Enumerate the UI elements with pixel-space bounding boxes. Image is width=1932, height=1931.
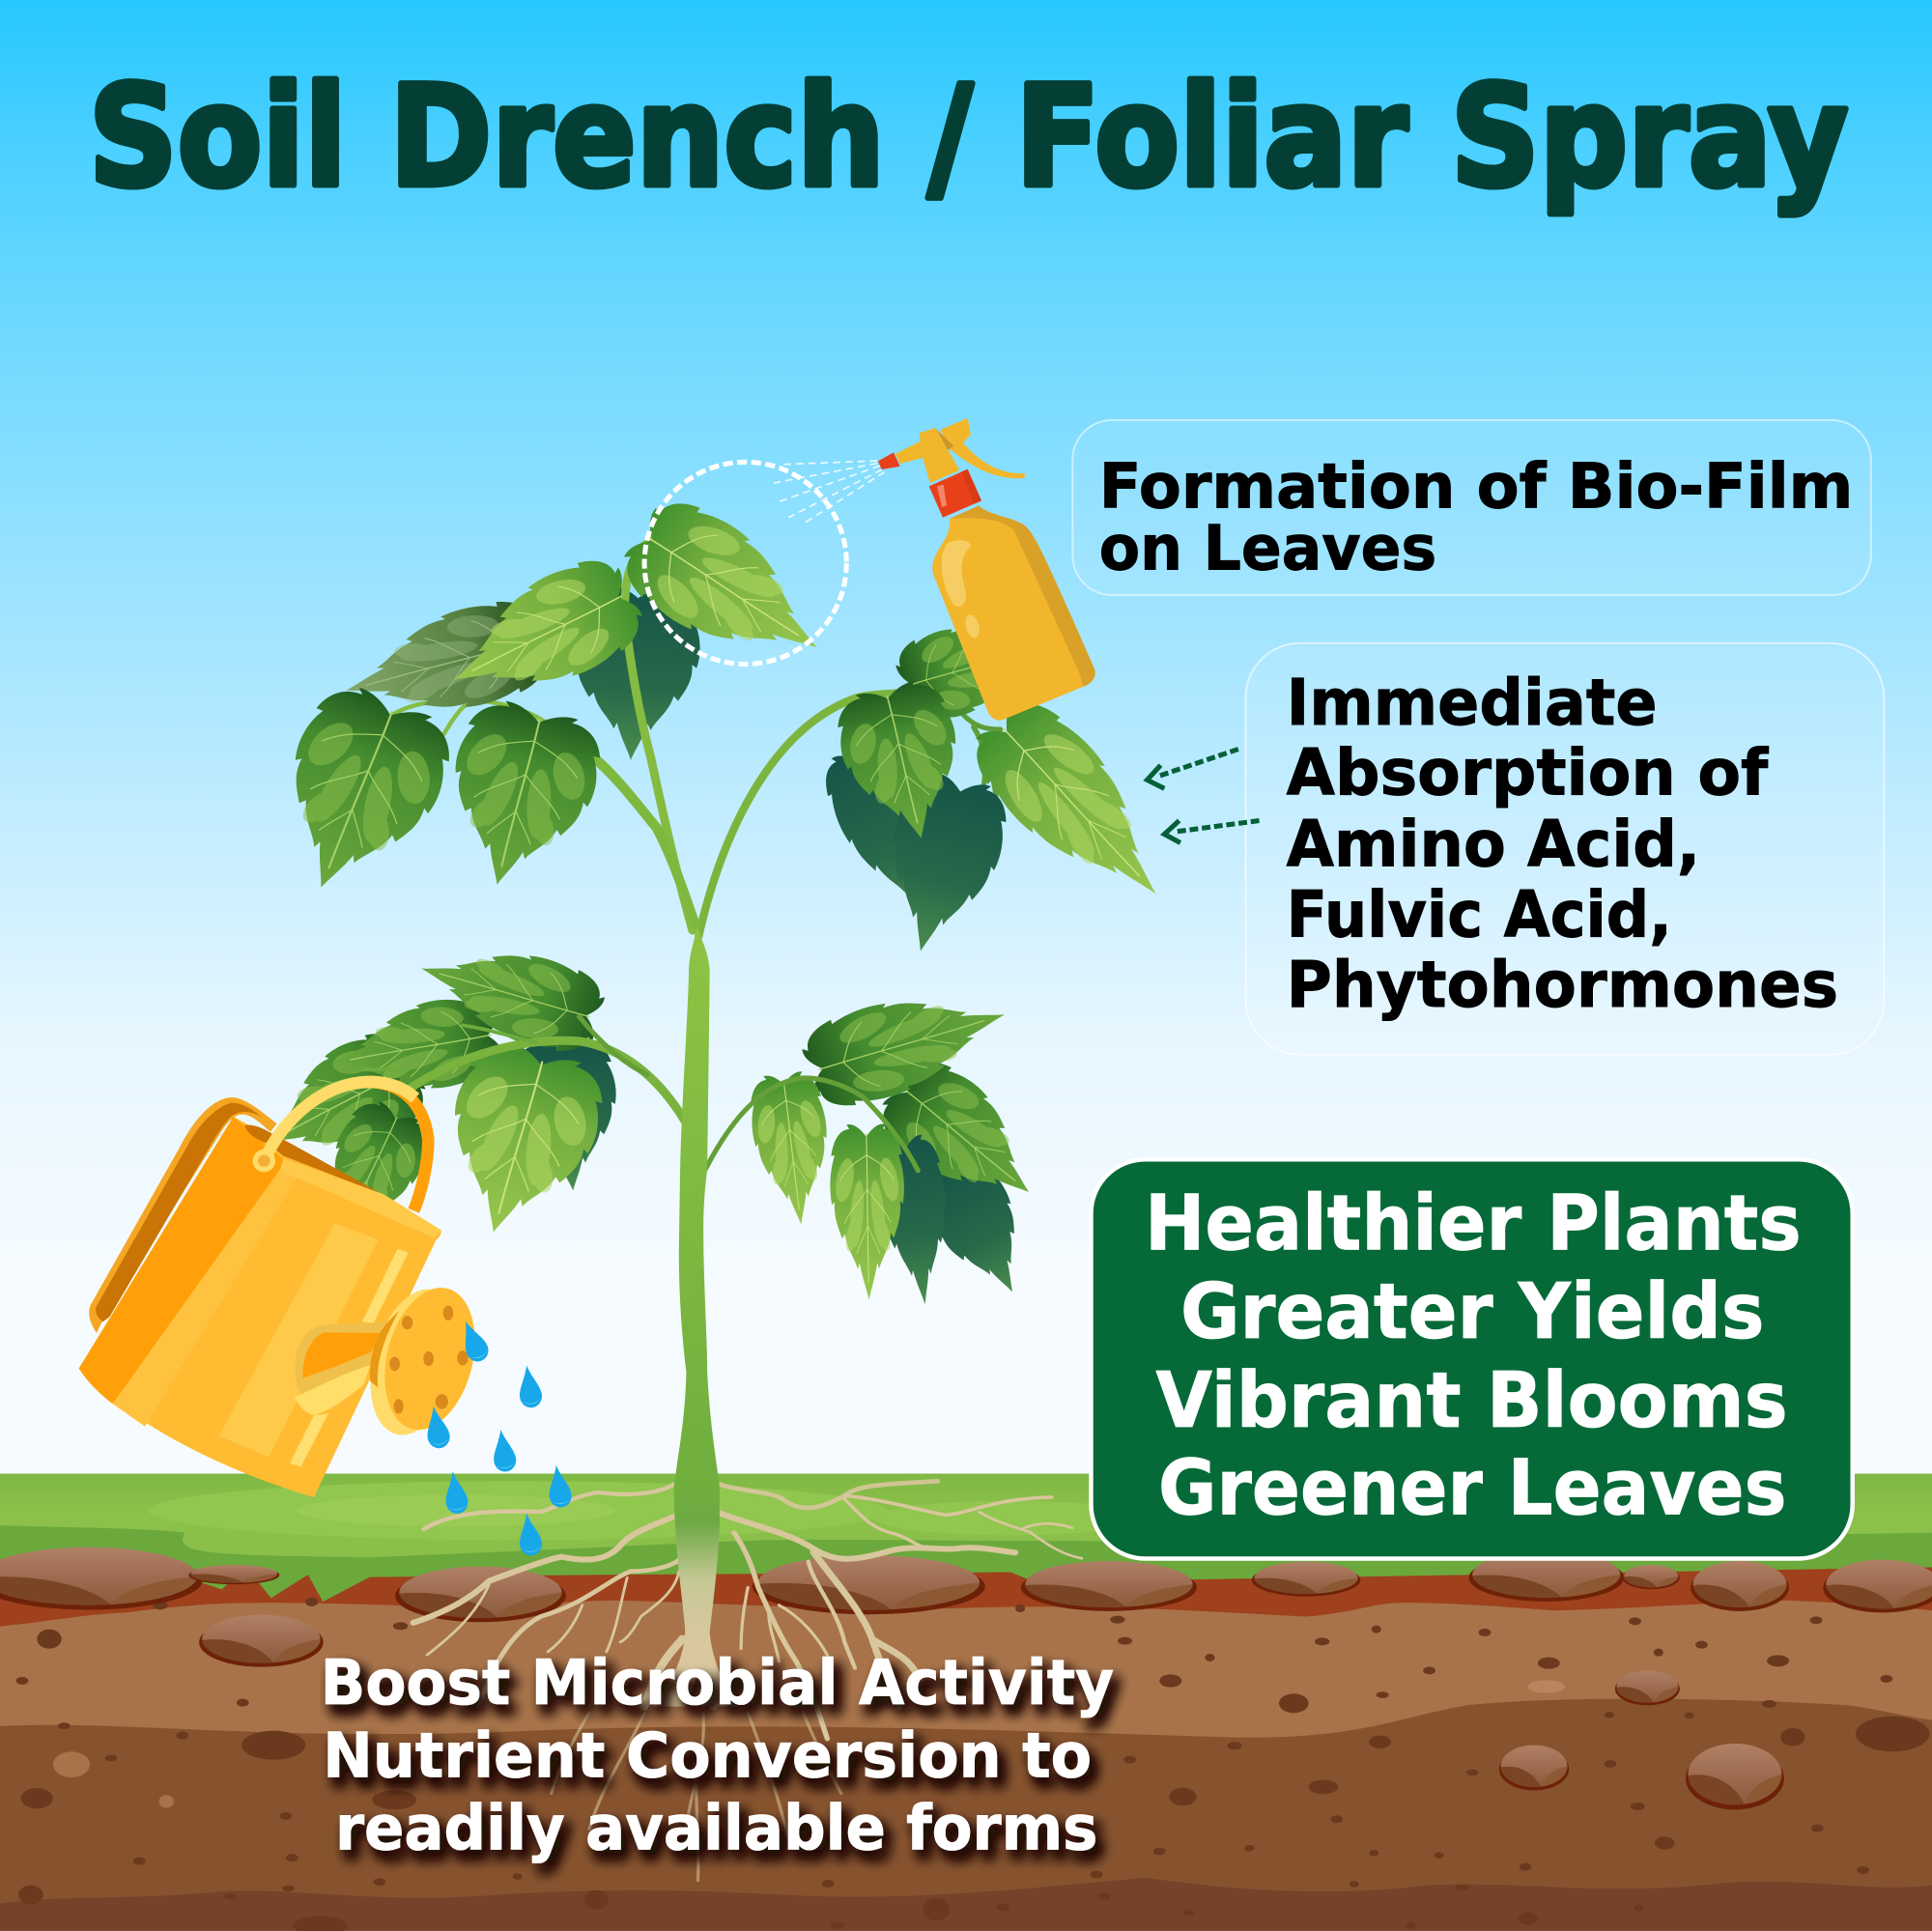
callout: bio-film panel: on Leaves [1099, 513, 1436, 584]
upper leaves left [252, 546, 653, 915]
grass band [0, 1474, 1932, 1609]
icon: watering can [79, 1082, 489, 1497]
plant [246, 486, 1194, 1881]
roots [413, 1481, 1082, 1881]
sky background [0, 0, 1932, 1479]
dashed spray target circle [644, 462, 846, 665]
surface stones [0, 1548, 1932, 1622]
sprayed leaf [610, 486, 847, 694]
callout: absorption panel [1246, 643, 1884, 1055]
callout: bio-film panel: Formation of Bio-Film [1099, 452, 1853, 524]
spray mist lines [774, 461, 885, 524]
water drops [422, 1318, 573, 1557]
shaded leaf behind stem [567, 582, 702, 763]
callout: absorption panel: Absorption of [1287, 735, 1769, 810]
ground: grass and soil layers [0, 1474, 1932, 1931]
topsoil red layer [0, 1567, 1932, 1931]
benefits panel: Greener Leaves [1158, 1444, 1786, 1533]
callout: absorption panel: Amino Acid, [1287, 807, 1700, 882]
subsoil mid layer [0, 1699, 1932, 1931]
callout: absorption panel: Phytohormones [1287, 947, 1838, 1022]
callout: bio-film panel [1072, 420, 1871, 595]
benefits panel: Vibrant Blooms [1155, 1356, 1788, 1445]
stems [363, 541, 1001, 1171]
benefits panel: Greater Yields [1180, 1267, 1765, 1356]
arrows to leaf [1148, 750, 1260, 842]
arrow two [1164, 821, 1260, 842]
main stem [653, 926, 737, 1707]
pebbles and specks [16, 1598, 1929, 1931]
arrow one [1148, 750, 1238, 788]
callout: absorption panel: Fulvic Acid, [1287, 876, 1672, 951]
subsoil light layer [0, 1601, 1932, 1931]
upper leaves right [812, 607, 1194, 964]
callout: absorption panel: Immediate [1287, 665, 1658, 740]
lower leaves left [246, 926, 624, 1252]
icon: spray bottle [878, 418, 1095, 721]
benefits panel: Healthier Plants [1145, 1178, 1802, 1267]
deep soil layer [0, 1878, 1932, 1931]
soil rocks [53, 1615, 1784, 1809]
soil text: Boost Microbial Activity [321, 1648, 1114, 1719]
lower leaves right [746, 971, 1060, 1311]
soil text: Nutrient Conversion to [323, 1720, 1092, 1792]
soil text [321, 1648, 1114, 1865]
benefits panel [1091, 1159, 1853, 1559]
soil text: readily available forms [335, 1794, 1097, 1865]
